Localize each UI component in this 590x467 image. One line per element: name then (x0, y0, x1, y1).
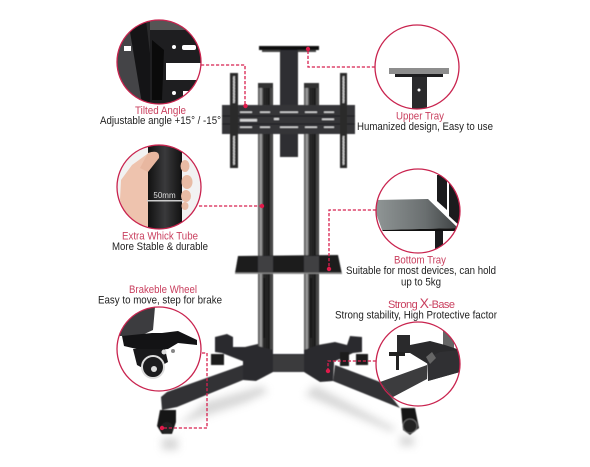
label: extra thick tube (112, 230, 208, 253)
label: bottom tray (346, 254, 496, 288)
circle: upper tray detail (375, 25, 459, 110)
label: tilted angle (100, 105, 221, 127)
upper tray and neck (259, 46, 319, 50)
label: bottom tray: Suitable for most devices, can hold (346, 265, 496, 277)
x base (161, 365, 243, 410)
label: tilted angle: Adjustable angle +15° / -15° (100, 115, 221, 127)
label: upper tray: Humanized design, Easy to use (357, 121, 493, 133)
label: extra thick tube: More Stable & durable (112, 241, 208, 253)
circle: tilted angle detail (117, 20, 202, 104)
shelf (235, 255, 342, 274)
label: brake wheel: Easy to move, step for brake (98, 294, 222, 306)
label: bottom tray: up to 5kg (401, 276, 441, 288)
label: brake wheel: Brakeble Wheel (129, 284, 197, 296)
label: tilted angle: Tilted Angle (135, 105, 186, 117)
TV stand product (157, 46, 419, 450)
label: upper tray (357, 110, 493, 133)
label: extra thick tube: Extra Whick Tube (122, 230, 198, 242)
circle: brake wheel detail (117, 307, 201, 391)
pole adjustment holes (263, 278, 312, 338)
poles (258, 83, 273, 358)
floor shadows (162, 385, 414, 450)
mount plate (222, 105, 355, 134)
circle: x-base detail (376, 322, 460, 408)
vesa brackets (230, 73, 238, 168)
casters (157, 408, 419, 435)
label: x-base (335, 295, 497, 322)
label: x-base: Strong X-Base (388, 295, 455, 311)
label: bottom tray: Bottom Tray (394, 254, 446, 266)
circle: tube detail (117, 145, 201, 232)
circle: bottom tray detail (376, 169, 462, 261)
tube width label: 50mm (153, 191, 176, 200)
label: upper tray: Upper Tray (396, 110, 444, 122)
dashed callout lines (160, 47, 376, 430)
rear base arms (215, 334, 362, 362)
label: x-base: Strong stability, High Protective factor (335, 310, 497, 322)
label: brake wheel (98, 284, 222, 306)
